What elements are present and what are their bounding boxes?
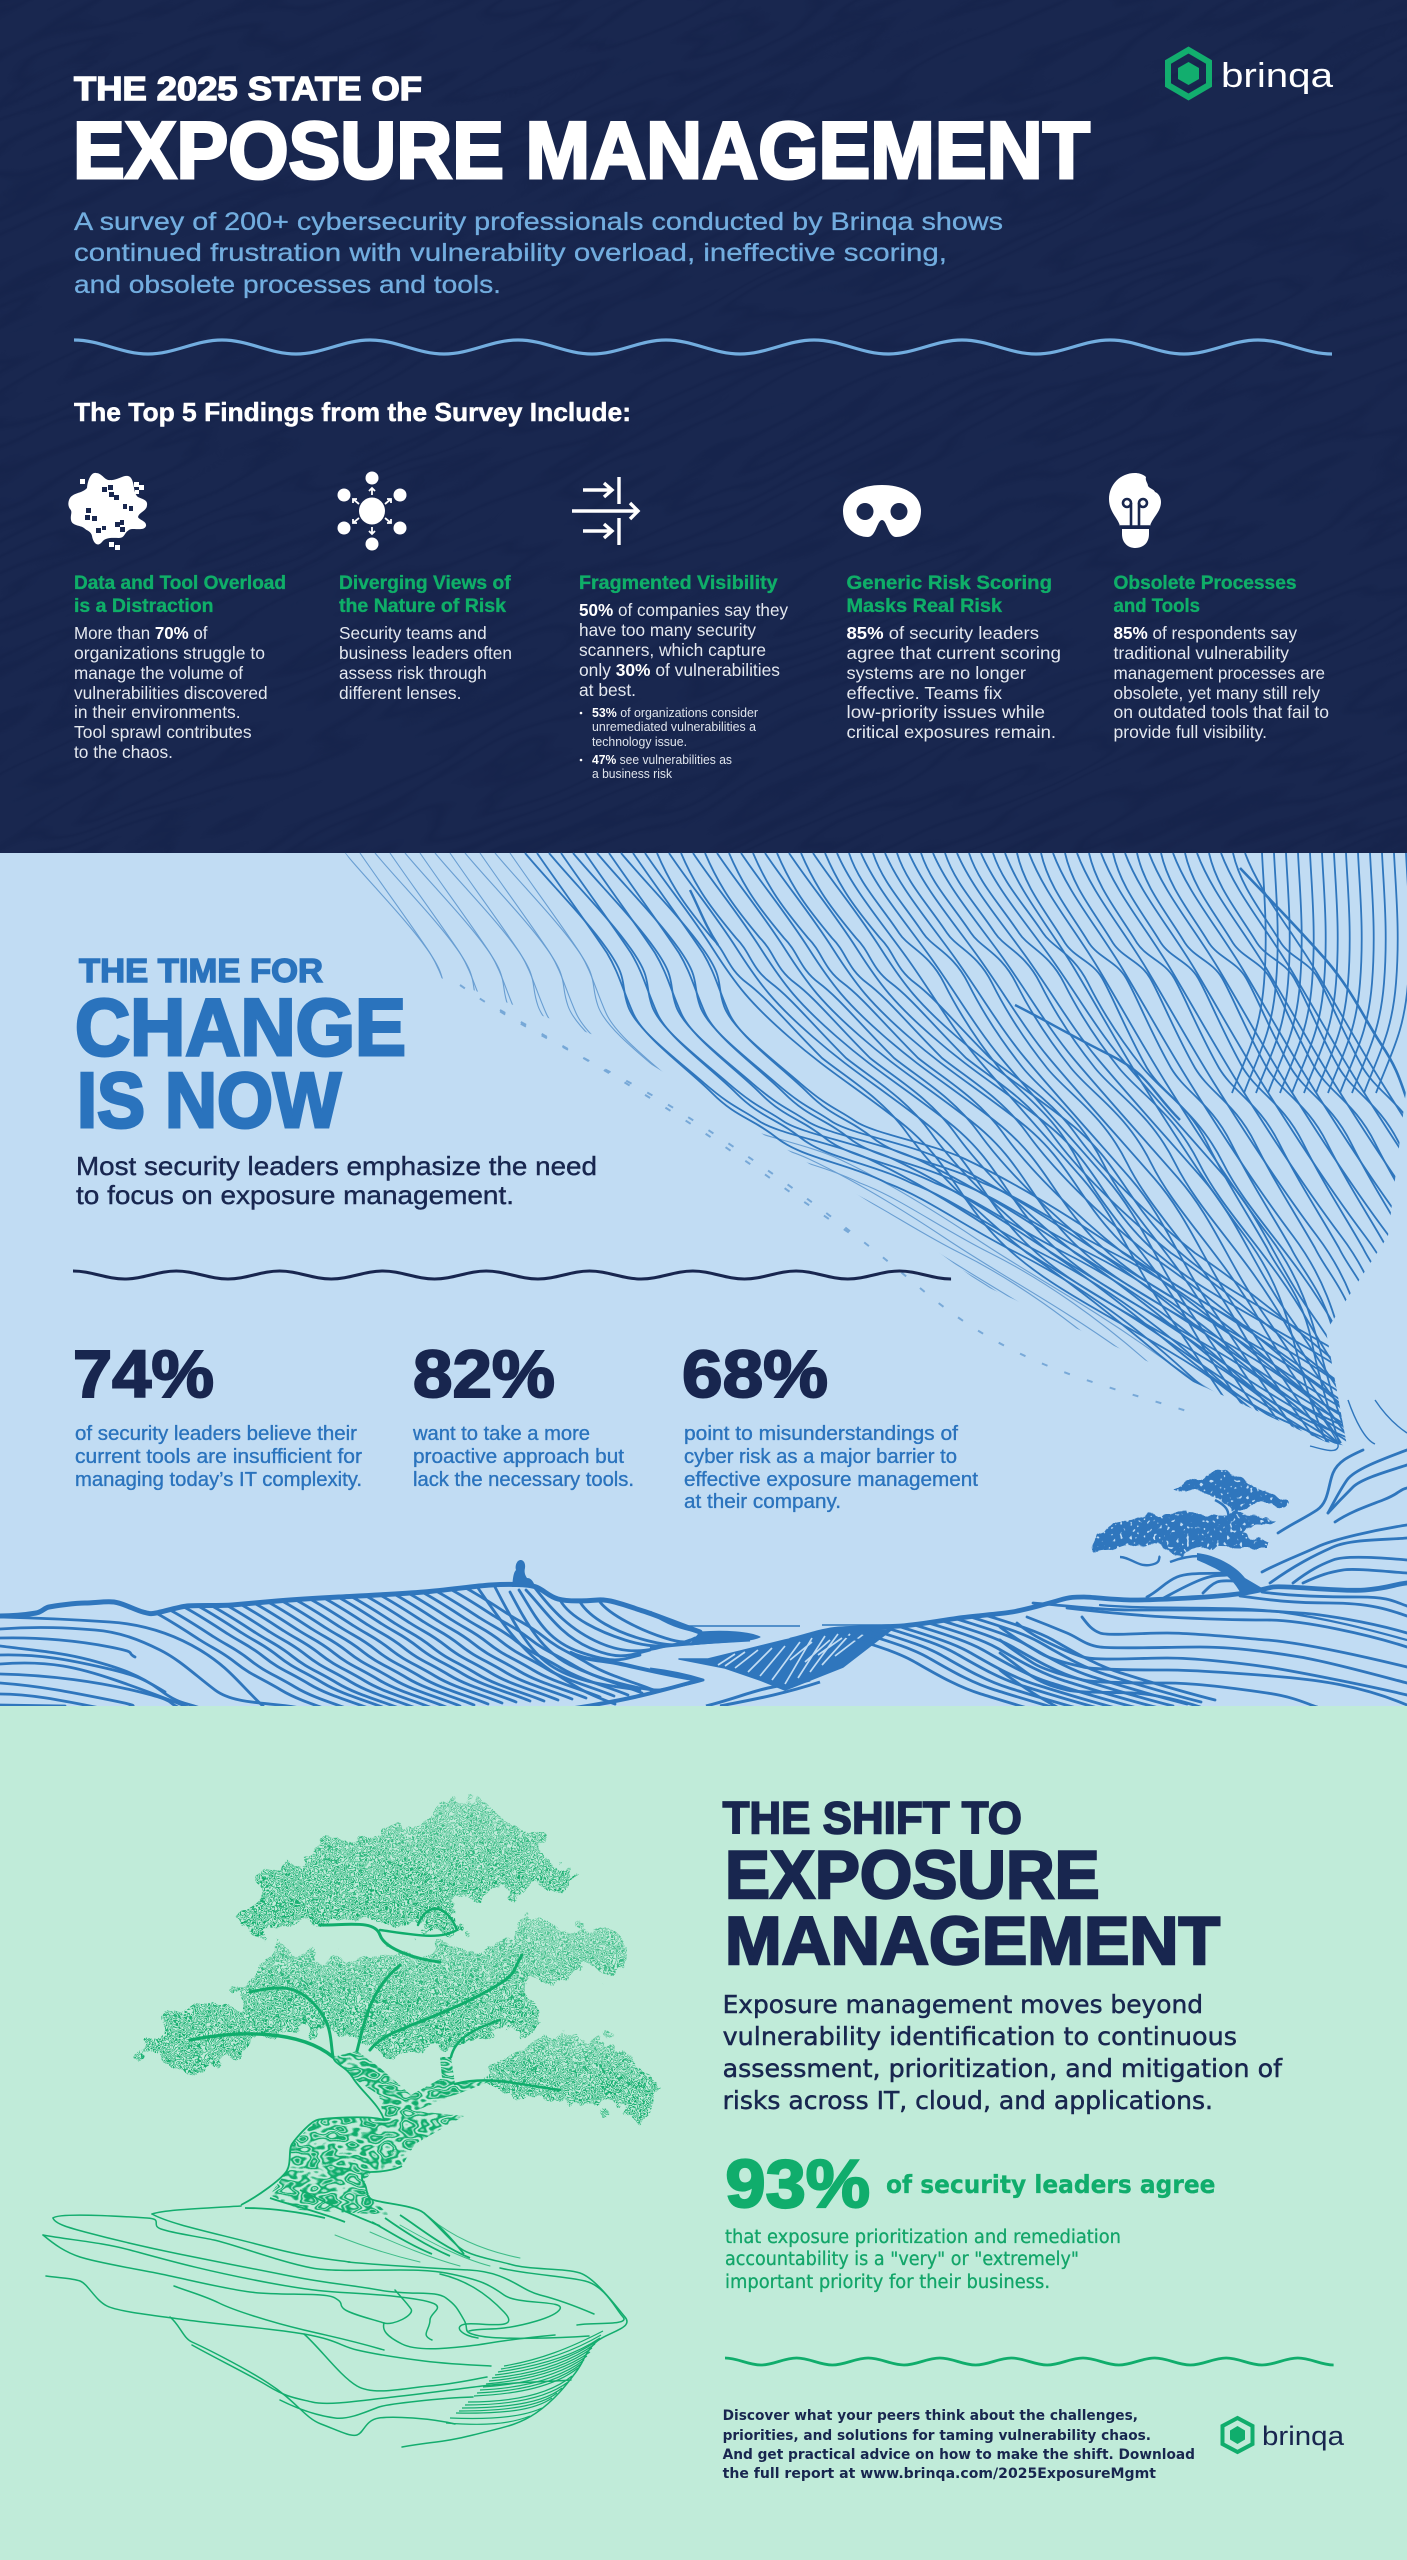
icon: broken light bulb [1109, 473, 1161, 548]
panel: survey findings (dark header) [68, 46, 1334, 778]
island cliff hatching [446, 2331, 603, 2424]
stat: 74% [73, 1337, 362, 1491]
figure sitting on ridge [512, 1560, 535, 1587]
body text: business leaders often [339, 643, 512, 663]
icon: mask [843, 485, 921, 537]
body text: risks across IT, cloud, and applications. [723, 2086, 1213, 2115]
heading: Generic Risk Scoring [846, 573, 1052, 594]
body text: only 30% of vulnerabilities [579, 660, 780, 680]
finding 2: diverging views [338, 472, 512, 703]
stat: 68%: 68% [682, 1337, 828, 1412]
stat: 68%: cyber risk as a major barrier to [684, 1446, 957, 1468]
heading: the Nature of Risk [339, 596, 506, 617]
panel: the shift to exposure management [0, 1706, 1407, 2560]
body text: to the chaos. [74, 742, 173, 762]
heading: the time for change is now: IS NOW [77, 1056, 341, 1144]
icon: hub with arrows [338, 472, 406, 550]
heading: Fragmented Visibility [579, 573, 778, 594]
body text: systems are no longer [846, 663, 1026, 683]
icon: converging arrows [572, 477, 638, 545]
body text: in their environments. [74, 702, 241, 722]
body text [1114, 623, 1329, 742]
body text: scanners, which capture [579, 640, 766, 660]
body text: vulnerabilities discovered [74, 683, 268, 703]
stat: 74%: 74% [73, 1337, 214, 1412]
stat: 93%: important priority for their business. [725, 2272, 1050, 2293]
panel: the time for change [0, 853, 1407, 1721]
stat: 93%: of security leaders agree [886, 2170, 1216, 2199]
body text: 85% of respondents say [1114, 623, 1297, 643]
body text: obsolete, yet many still rely [1114, 683, 1320, 703]
stat: 93%: that exposure prioritization and remediation [725, 2227, 1121, 2248]
stat: 93%: 93% [725, 2146, 870, 2222]
body text: assessment, prioritization, and mitigation of [723, 2054, 1283, 2083]
heading: and Tools [1114, 596, 1200, 617]
logo: brinqa [1168, 50, 1333, 97]
stat: 74%: of security leaders believe their [75, 1423, 357, 1445]
body text [723, 1990, 1283, 2115]
bullet list: unremediated vulnerabilities a [592, 720, 756, 734]
stat: 74%: managing today’s IT complexity. [75, 1469, 362, 1491]
body text [339, 623, 512, 703]
finding 4: generic risk scoring [843, 485, 1061, 742]
heading: the time for change is now [75, 952, 406, 1144]
intro text: A survey of 200+ cybersecurity professionals conducted by Brinqa shows [74, 208, 1003, 236]
heading: top 5 findings: The Top 5 Findings from the Survey Include: [74, 397, 631, 427]
logo: brinqa: brinqa [1221, 57, 1333, 95]
bullet list: 47% see vulnerabilities as [592, 753, 732, 767]
body text: vulnerability identification to continuous [723, 2022, 1237, 2051]
heading [1114, 573, 1296, 617]
body text: provide full visibility. [1114, 722, 1267, 742]
heading: Data and Tool Overload [74, 573, 286, 594]
body text: different lenses. [339, 683, 461, 703]
body text [579, 600, 788, 700]
heading [846, 573, 1052, 617]
illustration: flowing contour lines [0, 853, 1407, 1706]
stat: 82%: want to take a more [412, 1423, 590, 1445]
heading: the shift to exposure management: MANAGEMENT [725, 1903, 1220, 1979]
bullet list: a business risk [592, 767, 673, 781]
island contour lines [43, 2206, 627, 2447]
body text: agree that current scoring [846, 643, 1061, 663]
title: EXPOSURE MANAGEMENT [73, 106, 1090, 196]
blue tree [1095, 1471, 1287, 1592]
body text: effective. Teams fix [846, 683, 1002, 703]
heading: the time for change is now: THE TIME FOR [79, 952, 323, 989]
call to action text [723, 2408, 1195, 2482]
bullet list [580, 706, 758, 781]
intro text [74, 208, 1003, 299]
illustration: landscape with figure and tree [0, 1450, 1407, 1721]
stat: 68%: point to misunderstandings of [684, 1423, 958, 1445]
body text: More than 70% of [74, 623, 208, 643]
body text: traditional vulnerability [1114, 643, 1289, 663]
stat: 74%: current tools are insufficient for [75, 1446, 362, 1468]
stat: 82%: 82% [413, 1337, 555, 1412]
stat: 93%: accountability is a "very" or "extremely" [725, 2249, 1079, 2270]
body text: low-priority issues while [846, 702, 1045, 722]
stat: 68% [682, 1337, 978, 1513]
logo: brinqa footer: brinqa [1262, 2421, 1345, 2451]
heading: the shift to exposure management [723, 1792, 1220, 1979]
body text: 85% of security leaders [846, 623, 1039, 643]
heading: Diverging Views of [339, 573, 511, 594]
body text: 50% of companies say they [579, 600, 788, 620]
heading [339, 573, 511, 617]
stat: 82%: proactive approach but [413, 1446, 624, 1468]
body text: have too many security [579, 620, 756, 640]
stat: 82%: lack the necessary tools. [413, 1469, 634, 1491]
river banks [650, 1612, 895, 1706]
icon: data blob [68, 473, 147, 550]
lead text: to focus on exposure management. [76, 1180, 514, 1210]
stat: 93% [725, 2146, 1216, 2293]
right hill [791, 1450, 1407, 1721]
heading [74, 573, 286, 617]
finding 3: fragmented visibility [572, 477, 788, 781]
body text: Security teams and [339, 623, 487, 643]
body text: management processes are [1114, 663, 1325, 683]
body text: on outdated tools that fail to [1114, 702, 1329, 722]
lead text: Most security leaders emphasize the need [76, 1151, 597, 1181]
finding 1: data and tool overload [68, 473, 286, 762]
heading: Obsolete Processes [1114, 573, 1296, 594]
call to action text: And get practical advice on how to make the shift. Download [723, 2447, 1195, 2463]
heading: the shift to exposure management: EXPOSURE [725, 1837, 1100, 1913]
lead text [76, 1151, 597, 1210]
call to action text: priorities, and solutions for taming vulnerability chaos. [723, 2428, 1151, 2444]
bullet list: technology issue. [592, 735, 687, 749]
trunk [190, 1909, 560, 2258]
title [73, 70, 1090, 196]
left hill [0, 1584, 700, 1717]
call to action text: Discover what your peers think about the challenges, [723, 2408, 1138, 2424]
body text: at best. [579, 680, 636, 700]
body text: assess risk through [339, 663, 487, 683]
body text: organizations struggle to [74, 643, 265, 663]
stat: 68%: at their company. [684, 1491, 841, 1513]
bullet list: 53% of organizations consider [592, 706, 758, 720]
heading: Masks Real Risk [846, 596, 1002, 617]
body text: manage the volume of [74, 663, 243, 683]
body text: Exposure management moves beyond [723, 1990, 1203, 2019]
heading: the shift to exposure management: THE SHIFT TO [723, 1792, 1022, 1844]
intro text: and obsolete processes and tools. [74, 271, 501, 299]
heading: the time for change is now: CHANGE [75, 983, 406, 1073]
logo: brinqa footer [1222, 2418, 1345, 2452]
body text: Tool sprawl contributes [74, 722, 252, 742]
canopy [138, 1799, 661, 2117]
intro text: continued frustration with vulnerability overload, ineffective scoring, [74, 239, 947, 267]
stat: 68%: effective exposure management [684, 1469, 978, 1491]
body text: critical exposures remain. [846, 722, 1056, 742]
stat: 82% [412, 1337, 634, 1491]
body text [846, 623, 1061, 742]
body text [74, 623, 268, 762]
illustration: bonsai on floating island [43, 1799, 661, 2447]
heading: is a Distraction [74, 596, 214, 617]
finding 5: obsolete processes [1109, 473, 1329, 742]
call to action text: the full report at www.brinqa.com/2025ExposureMgmt [723, 2466, 1156, 2482]
mask for the empty sky under the line field [0, 853, 1407, 1706]
title: THE 2025 STATE OF [74, 70, 422, 107]
